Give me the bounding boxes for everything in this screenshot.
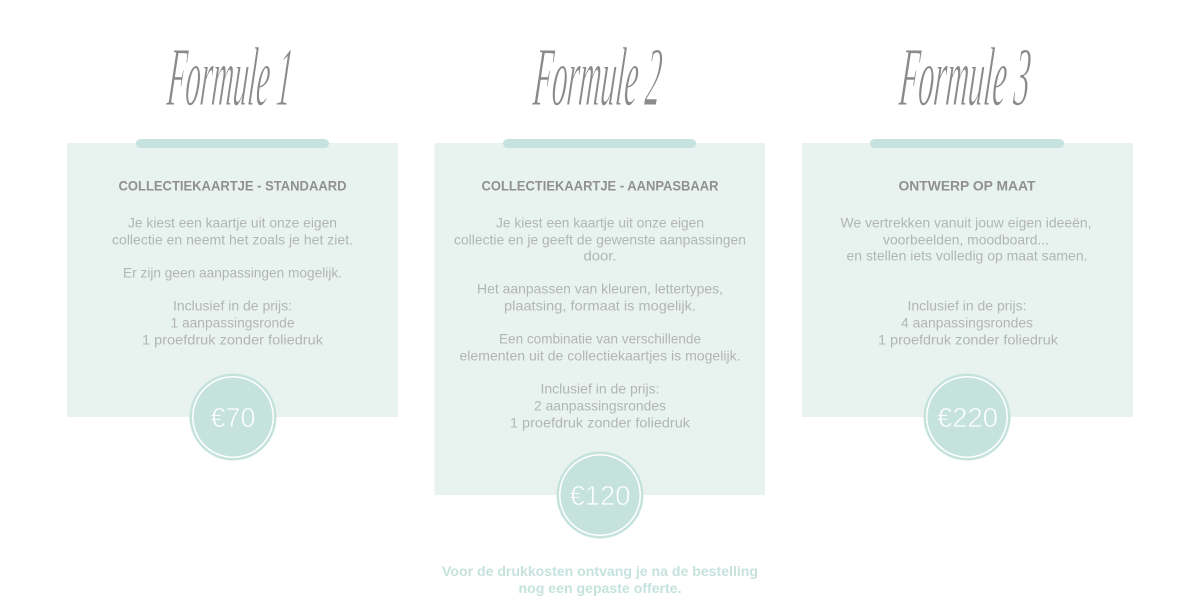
accent bar 1 <box>136 139 329 148</box>
description 2: plaatsing, formaat is mogelijk. <box>504 298 696 314</box>
card background 1 <box>67 143 398 417</box>
footer note <box>442 563 758 596</box>
description 2: collectie en je geeft de gewenste aanpassingen <box>454 232 746 248</box>
included in price 1 <box>142 298 324 348</box>
description 3 <box>840 214 1092 264</box>
included in price 1: 1 proefdruk zonder foliedruk <box>142 332 324 348</box>
card title 2: COLLECTIEKAARTJE - AANPASBAAR <box>482 178 718 194</box>
description 2: Een combinatie van verschillende <box>499 330 701 346</box>
included in price 3: 4 aanpassingsrondes <box>901 314 1033 330</box>
included in price 1: 1 aanpassingsronde <box>170 314 295 330</box>
description 2: Je kiest een kaartje uit onze eigen <box>496 214 704 230</box>
card background 3 <box>802 143 1133 417</box>
description 1: collectie en neemt het zoals je het ziet. <box>112 232 353 248</box>
price badge 220: €220 <box>937 402 998 433</box>
description 2: Het aanpassen van kleuren, lettertypes, <box>477 280 723 296</box>
panel: formule 1 <box>67 31 398 460</box>
included in price 3 <box>878 298 1059 348</box>
footer note: Voor de drukkosten ontvang je na de bestelling <box>442 563 758 579</box>
footer note: nog een gepaste offerte. <box>518 580 682 596</box>
panel: formule 3 <box>802 31 1133 460</box>
price badge 70: €70 <box>210 402 256 433</box>
panel: formule 1: Formule 1 <box>164 31 296 124</box>
card title 3: ONTWERP OP MAAT <box>898 178 1036 194</box>
price badge 120: €120 <box>570 480 630 511</box>
panel: formule 2 <box>434 31 765 538</box>
included in price 2 <box>510 380 691 430</box>
included in price 2: Inclusief in de prijs: <box>540 380 660 396</box>
accent bar 3 <box>870 139 1064 148</box>
included in price 3: 1 proefdruk zonder foliedruk <box>878 332 1059 348</box>
included in price 3: Inclusief in de prijs: <box>908 298 1026 314</box>
price badge 70 <box>190 374 276 460</box>
panel: formule 2: Formule 2 <box>530 31 665 124</box>
description 3: voorbeelden, moodboard... <box>883 232 1049 248</box>
price badge 120 <box>556 452 644 538</box>
accent bar 2 <box>503 139 696 148</box>
description 3: en stellen iets volledig op maat samen. <box>846 248 1088 264</box>
card background 2 <box>434 143 765 495</box>
included in price 2: 2 aanpassingsrondes <box>534 398 666 414</box>
description 1 <box>112 214 353 280</box>
included in price 1: Inclusief in de prijs: <box>173 298 292 314</box>
price badge 220 <box>924 374 1010 460</box>
description 1: Er zijn geen aanpassingen mogelijk. <box>123 264 342 280</box>
card title 1: COLLECTIEKAARTJE - STANDAARD <box>118 178 346 194</box>
description 2: elementen uit de collectiekaartjes is mogelijk. <box>460 348 740 364</box>
description 2: door. <box>584 248 616 264</box>
included in price 2: 1 proefdruk zonder foliedruk <box>510 414 691 430</box>
description 2 <box>454 214 746 364</box>
description 3: We vertrekken vanuit jouw eigen ideeën, <box>840 214 1092 230</box>
description 1: Je kiest een kaartje uit onze eigen <box>128 214 337 230</box>
